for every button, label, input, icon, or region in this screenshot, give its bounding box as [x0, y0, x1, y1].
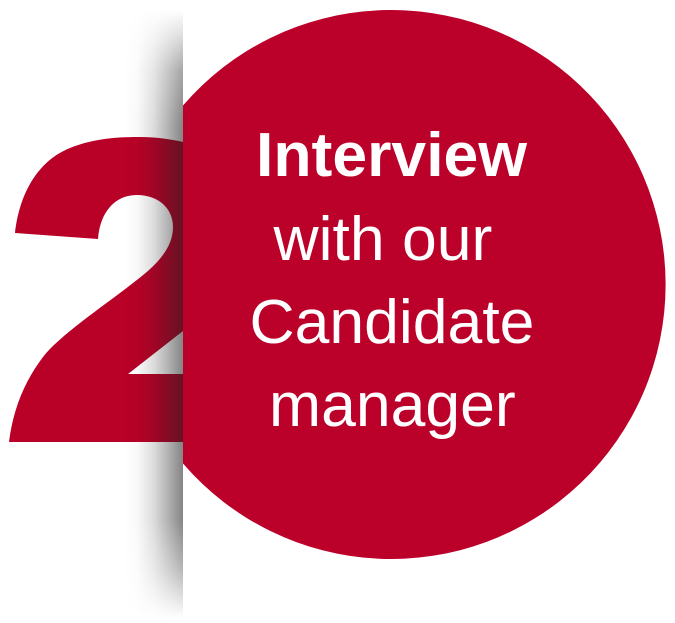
- text: manager: manager: [269, 370, 516, 440]
- text: with our: with our: [272, 204, 492, 274]
- heading: Interview: Interview: [256, 120, 527, 190]
- page fold shadow: [138, 16, 183, 612]
- red circle panel: [183, 10, 666, 559]
- numeral 2: [9, 137, 183, 442]
- text: Candidate: Candidate: [250, 287, 534, 357]
